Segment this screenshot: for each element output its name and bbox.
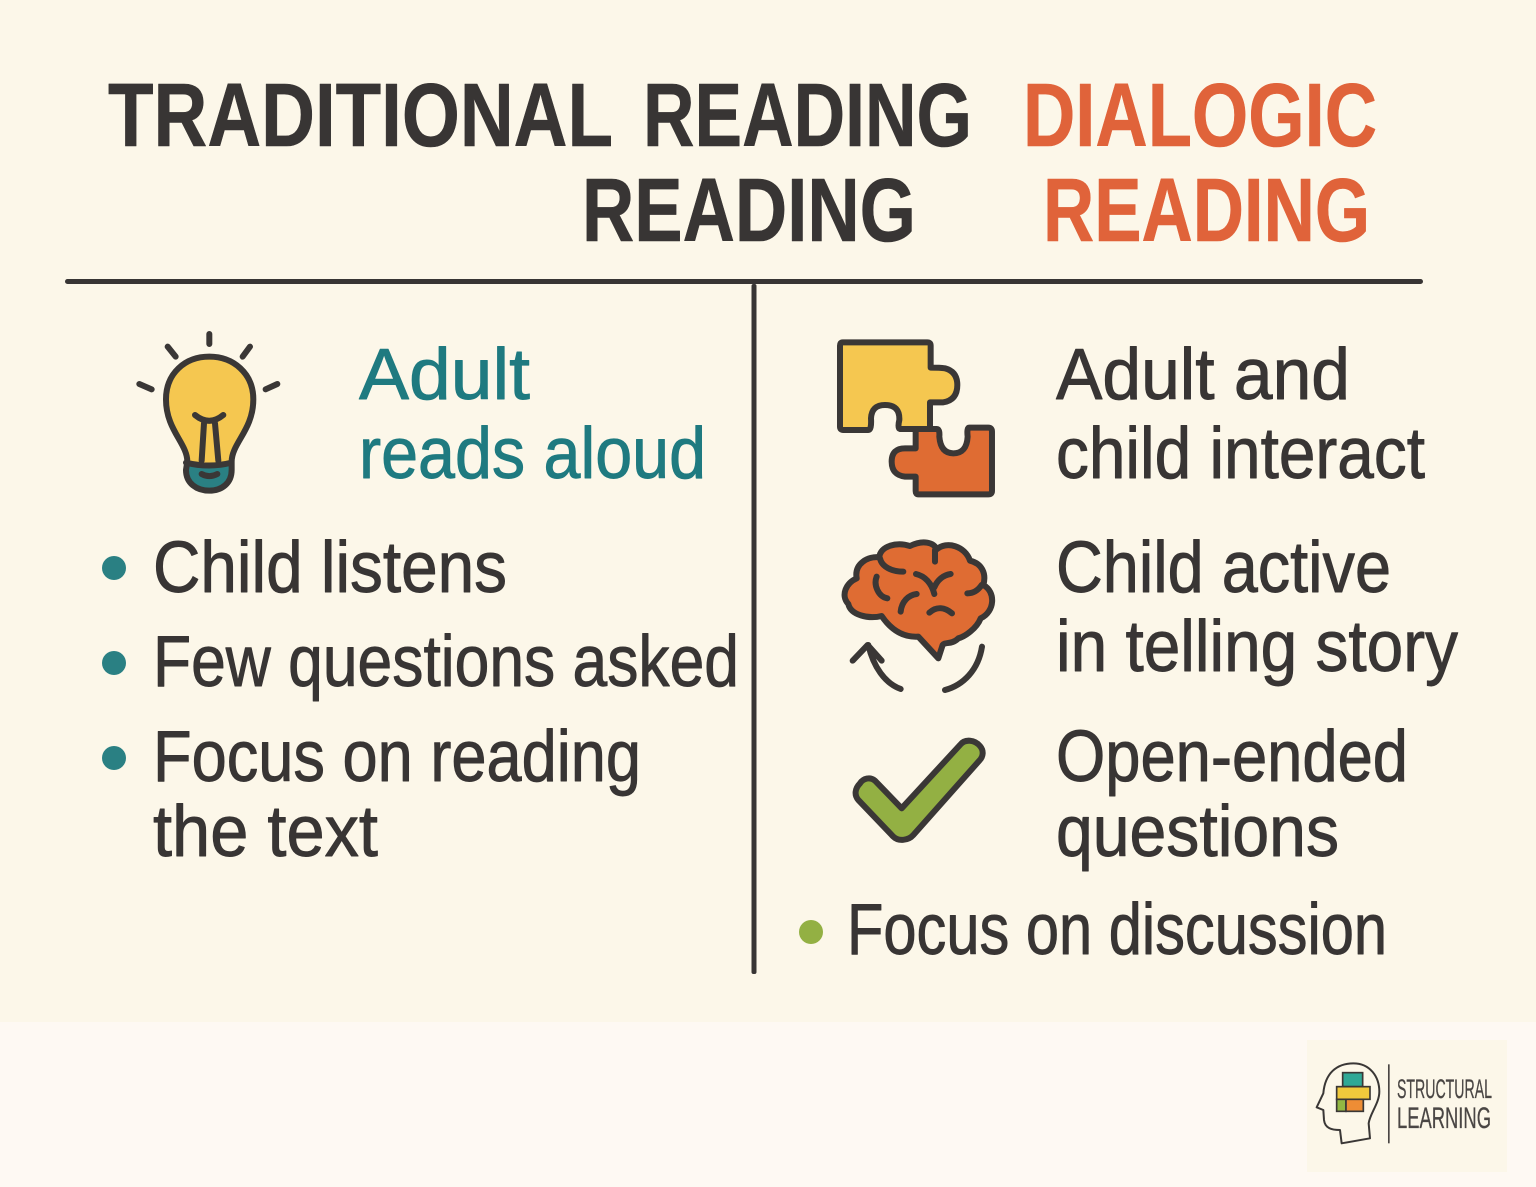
icon: head with blocks [1317,1063,1390,1143]
title: traditional reading [108,66,972,261]
title: traditional reading: READING [643,66,972,166]
text: adult and child interact: Adult and [1056,335,1350,415]
logo: structural learning [1307,1040,1507,1172]
bullet: focus on reading the text: the text [153,792,378,872]
text: adult and child interact: child interact [1056,414,1425,494]
logo text [1397,1074,1492,1135]
text: open-ended questions: Open-ended [1056,717,1408,797]
bullet: focus on reading the text [102,717,641,872]
bullet: child listens: Child listens [153,528,507,608]
text: adult and child interact [1056,335,1425,494]
icon: check mark [856,741,983,840]
text: adult reads aloud: Adult [359,335,530,415]
panel: dialogic reading [799,335,1458,970]
bullet: few questions asked: Few questions asked [153,622,739,702]
icon: light bulb [139,334,277,491]
title: traditional reading: READING [582,161,916,261]
panel: traditional reading [102,334,739,872]
text: child active in telling story: in telling story [1056,607,1458,687]
text: adult reads aloud [359,335,706,494]
text: child active in telling story [1056,528,1458,687]
bullet: focus on reading the text: Focus on reading [153,717,641,797]
text: child active in telling story: Child active [1056,528,1391,608]
bullet: focus on discussion: Focus on discussion [847,890,1387,970]
title: dialogic reading: DIALOGIC [1023,66,1377,166]
icon: puzzle pieces [840,342,992,494]
title: dialogic reading [1023,66,1377,261]
text: adult reads aloud: reads aloud [359,414,706,494]
text: open-ended questions: questions [1056,792,1339,872]
text: open-ended questions [1056,717,1408,872]
icon: brain with cycle arrows [845,542,992,690]
title: traditional reading: TRADITIONAL [108,66,613,166]
title: dialogic reading: READING [1043,161,1370,261]
